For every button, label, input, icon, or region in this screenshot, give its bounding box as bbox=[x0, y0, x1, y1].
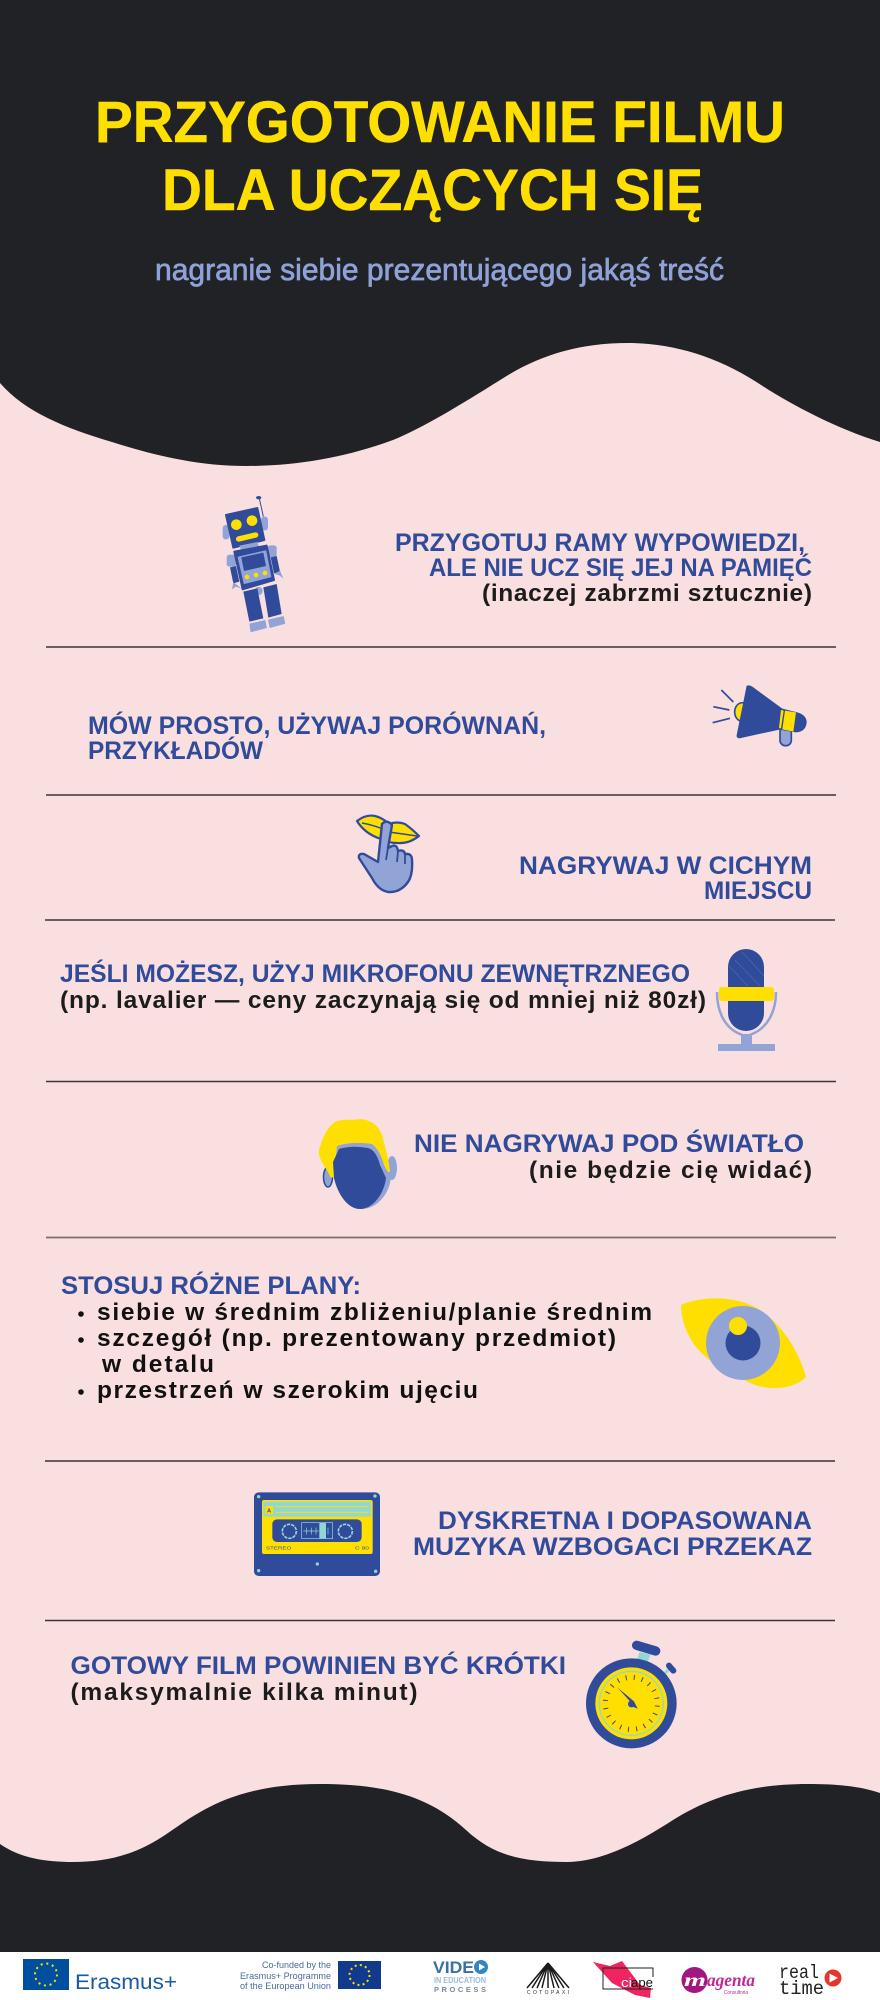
icon: stopwatch bbox=[586, 1645, 677, 1748]
logo: Real Time bbox=[779, 1962, 842, 2000]
logo: Ciape bbox=[593, 1961, 653, 1998]
logo: co-funded by EU bbox=[240, 1960, 381, 1992]
logo: Cotopaxi: COTOPAXI bbox=[527, 1990, 569, 1996]
logo: Video in Education Process: VIDE bbox=[433, 1958, 474, 1977]
footer: logo strip bbox=[0, 1952, 880, 2000]
logo: Magenta: agenta bbox=[707, 1970, 755, 1990]
logo: Magenta: Consultoria bbox=[724, 1990, 749, 1996]
logo: Cotopaxi bbox=[527, 1963, 569, 1996]
logo: co-funded by EU: of the European Union bbox=[240, 1981, 331, 1992]
logo: Video in Education Process: IN EDUCATION bbox=[434, 1976, 486, 1985]
text: shot types heading: STOSUJ RÓŻNE PLANY: bbox=[61, 1270, 361, 1300]
text: backlight bbox=[414, 1128, 812, 1184]
text: music: DYSKRETNA I DOPASOWANA bbox=[438, 1507, 812, 1535]
panel: backlight tip bbox=[319, 1119, 812, 1209]
list: shot types: w detalu bbox=[101, 1351, 214, 1378]
icon: microphone bbox=[717, 949, 776, 1051]
text: speak simply bbox=[88, 710, 546, 765]
logo: Video in Education Process bbox=[433, 1958, 488, 1994]
text: speak simply: PRZYKŁADÓW bbox=[88, 735, 263, 765]
header panel: dark wave bbox=[0, 0, 880, 466]
panel: music tip bbox=[254, 1492, 812, 1576]
title: DLA UCZĄCYCH SIĘ bbox=[162, 158, 703, 223]
icon: megaphone bbox=[713, 685, 807, 746]
list: shot types: szczegół (np. prezentowany przedmiot) bbox=[97, 1325, 616, 1352]
panel: quiet place tip bbox=[357, 816, 812, 905]
subtitle: nagranie siebie prezentującego jakąś treść bbox=[155, 252, 724, 287]
text: short film bbox=[70, 1650, 566, 1706]
icon: cassette: STEREO bbox=[266, 1546, 292, 1551]
text: framework: PRZYGOTUJ RAMY WYPOWIEDZI, bbox=[395, 529, 805, 557]
icon: cassette: C 90 bbox=[355, 1546, 370, 1551]
panel: speak simply tip bbox=[88, 685, 807, 765]
panel: shot types tip bbox=[61, 1270, 806, 1404]
logo: Real Time: real bbox=[779, 1962, 819, 1984]
logo: Video in Education Process: PROCESS bbox=[434, 1985, 486, 1994]
logo: co-funded by EU: Erasmus+ Programme bbox=[240, 1971, 331, 1982]
text: short film: GOTOWY FILM POWINIEN BYĆ KRÓTKI bbox=[70, 1650, 566, 1680]
icon: cassette: A bbox=[267, 1508, 271, 1514]
logo: Ciape: ape bbox=[631, 1975, 653, 1990]
text: microphone: JEŚLI MOŻESZ, UŻYJ MIKROFONU ZEWNĘTRZNEGO bbox=[60, 958, 690, 988]
logo: Real Time: time bbox=[779, 1978, 824, 2000]
text: quiet place bbox=[519, 852, 812, 905]
title: PRZYGOTOWANIE FILMU bbox=[95, 90, 785, 155]
icon: hand on lips bbox=[357, 816, 419, 892]
icon: eye bbox=[681, 1298, 806, 1388]
logo: Magenta: m bbox=[684, 1970, 706, 1990]
panel: external microphone tip bbox=[60, 949, 776, 1051]
text: microphone bbox=[60, 958, 706, 1014]
text: microphone: (np. lavalier — ceny zaczynają się od mniej niż 80zł) bbox=[60, 987, 706, 1014]
logo: co-funded by EU: Co-funded by the bbox=[262, 1960, 331, 1971]
text: speak simply: MÓW PROSTO, UŻYWAJ PORÓWNAŃ, bbox=[88, 710, 546, 740]
text: framework: ALE NIE UCZ SIĘ JEJ NA PAMIĘĆ bbox=[429, 552, 812, 582]
text: framework bbox=[395, 529, 812, 607]
list: shot types: przestrzeń w szerokim ujęciu bbox=[97, 1377, 478, 1404]
title bbox=[95, 90, 785, 223]
panel: framework tip bbox=[223, 496, 812, 632]
text: framework: (inaczej zabrzmi sztucznie) bbox=[482, 580, 812, 607]
icon: robot bbox=[223, 496, 285, 632]
text: music: MUZYKA WZBOGACI PRZEKAZ bbox=[413, 1533, 812, 1561]
logo: Erasmus+: Erasmus+ bbox=[75, 1971, 177, 1994]
text: quiet place: NAGRYWAJ W CICHYM bbox=[519, 852, 812, 880]
list: shot types bbox=[78, 1299, 652, 1404]
panel: short film tip bbox=[70, 1645, 677, 1748]
text: backlight: NIE NAGRYWAJ POD ŚWIATŁO bbox=[414, 1128, 804, 1158]
logo: Ciape: ci bbox=[621, 1975, 632, 1990]
icon: cassette bbox=[254, 1492, 380, 1576]
text: short film: (maksymalnie kilka minut) bbox=[70, 1679, 418, 1706]
logo: Erasmus+ bbox=[23, 1959, 177, 1994]
icon: backlit head bbox=[319, 1119, 397, 1209]
footer panel: dark wave bbox=[0, 1784, 880, 1952]
logo: Magenta bbox=[682, 1967, 755, 1996]
list: shot types: siebie w średnim zbliżeniu/planie średnim bbox=[97, 1299, 652, 1326]
text: quiet place: MIEJSCU bbox=[704, 877, 812, 905]
text: backlight: (nie będzie cię widać) bbox=[529, 1157, 812, 1184]
text: music bbox=[413, 1507, 812, 1561]
